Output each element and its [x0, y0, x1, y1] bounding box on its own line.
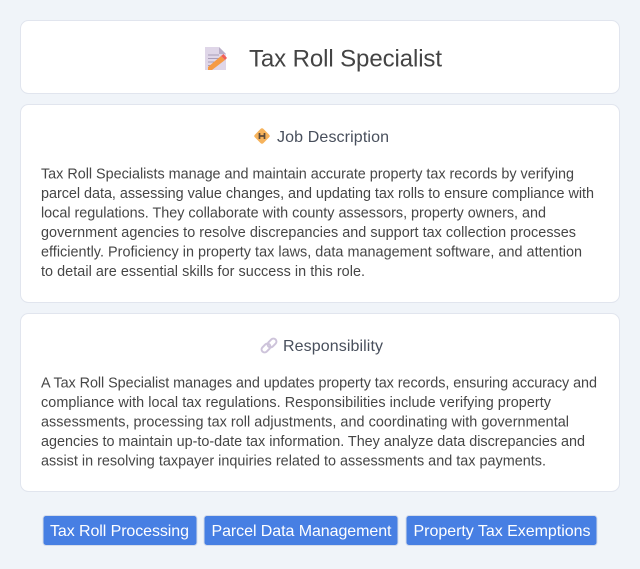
icon: diamond sign [254, 128, 270, 144]
tag: Tax Roll Processing [43, 516, 197, 546]
text block: job description: local regulations. They collaborate with county assessors, property owners, and [41, 206, 546, 222]
panel: responsibility [20, 314, 620, 492]
text block: responsibility: A Tax Roll Specialist manages and updates property tax records, ensuring accuracy and [41, 376, 597, 392]
tag: Parcel Data Management [204, 516, 398, 546]
text block: responsibility: agencies to maintain up-to-date tax information. They analyze data discrepancies and [41, 434, 585, 450]
tag: Parcel Data Management: Parcel Data Management [212, 523, 392, 540]
heading: title text: Tax Roll Specialist [249, 46, 442, 72]
panel: job description [20, 104, 620, 302]
tag: Property Tax Exemptions [406, 516, 597, 546]
text block: job description: efficiently. Proficiency in property tax laws, data management software, and attention [41, 244, 582, 260]
panel: title [20, 20, 620, 94]
icon: link [260, 337, 278, 354]
heading: job description: Job Description [277, 129, 389, 146]
tag: Tax Roll Processing: Tax Roll Processing [50, 523, 189, 540]
text block: job description: government agencies to resolve discrepancies and support tax collection processes [41, 225, 576, 241]
heading: responsibility: Responsibility [283, 338, 383, 355]
tag: Property Tax Exemptions: Property Tax Exemptions [414, 523, 590, 540]
icon: document with pencil [205, 47, 227, 70]
text block: responsibility: compliance with local tax regulations. Responsibilities include verifying property [41, 395, 552, 411]
text block: responsibility [41, 376, 597, 470]
text block: job description: Tax Roll Specialists manage and maintain accurate property tax records by verifying [41, 167, 574, 183]
text block: responsibility: assist in resolving taxpayer inquiries related to assessments and tax payments. [41, 454, 546, 470]
text block: job description: to detail are essential skills for success in this role. [41, 264, 365, 280]
text block: responsibility: assessments, processing tax roll adjustments, and coordinating with governmental [41, 415, 569, 431]
text block: job description: parcel data, assessing value changes, and updating tax rolls to ensure compliance with [41, 186, 594, 202]
text block: job description [41, 167, 594, 280]
